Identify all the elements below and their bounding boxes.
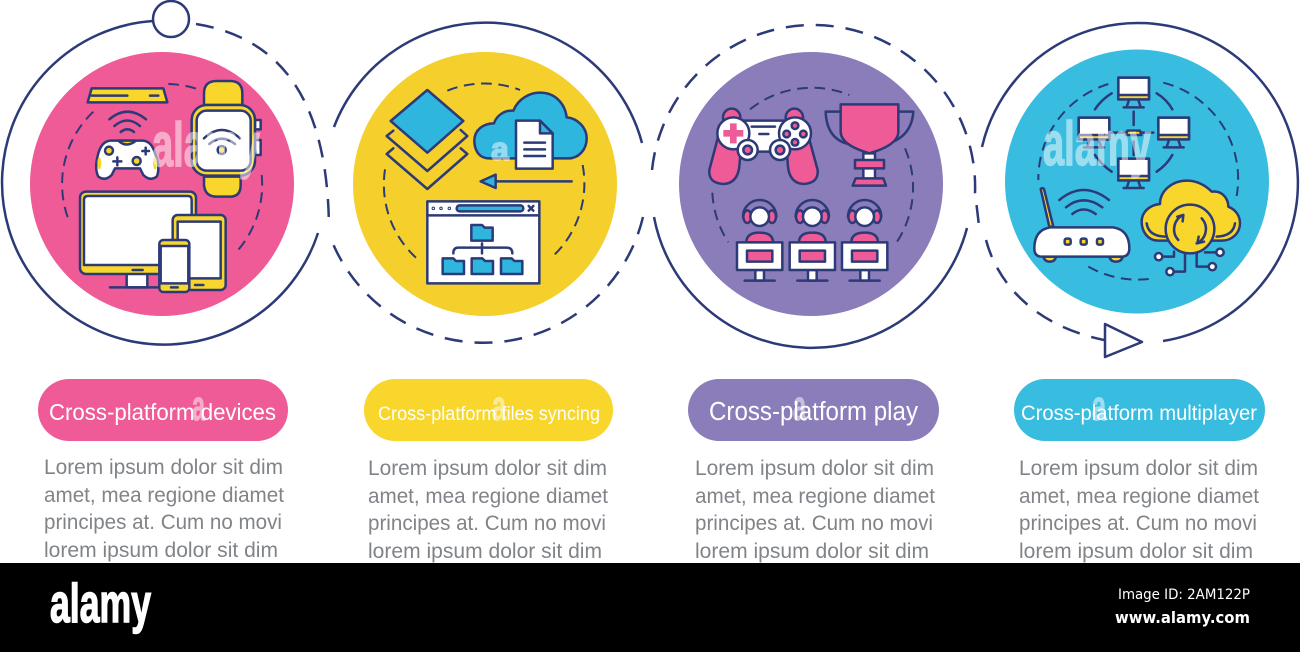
panel: cross-platform play circle	[652, 25, 979, 348]
text block: play: amet, mea regione diamet	[695, 484, 935, 508]
icon: folder tree window	[427, 201, 539, 283]
heading pill: multiplayer	[1014, 379, 1265, 441]
heading pill: play: Cross-platform play	[709, 398, 918, 426]
icon: gamepad with wifi	[96, 112, 158, 179]
icon: set-top box	[88, 88, 167, 102]
heading pill: play: a	[793, 382, 806, 429]
heading pill: multiplayer: Cross-platform multiplayer	[1021, 402, 1257, 425]
watermark: alamy	[152, 111, 260, 180]
arrow: end triangle	[1105, 324, 1142, 357]
text block: multiplayer	[1019, 456, 1259, 563]
icon: networked computers	[1079, 78, 1189, 188]
icon: monitor, tablet and phone	[80, 192, 226, 292]
text block: play: lorem ipsum dolor sit dim	[695, 539, 929, 563]
icon: cloud sync circuit	[1142, 181, 1240, 275]
icon: cloud document	[474, 93, 587, 169]
heading pill: files syncing: a	[492, 382, 506, 429]
icon: layers	[387, 90, 467, 189]
text block: files syncing	[368, 456, 608, 563]
heading pill: files syncing: Cross-platform files syncing	[378, 403, 600, 425]
text block: multiplayer: lorem ipsum dolor sit dim	[1019, 539, 1253, 563]
icon: smartwatch	[192, 81, 261, 197]
watermark: a	[491, 131, 509, 167]
text block: multiplayer: amet, mea regione diamet	[1019, 484, 1259, 508]
arrow: sync to window	[481, 175, 572, 188]
text block: devices: amet, mea regione diamet	[44, 483, 284, 507]
heading pill: devices	[38, 379, 288, 441]
text block: play	[695, 456, 935, 563]
panel: cross-platform devices circle	[2, 1, 329, 345]
footer band: Image ID: 2AM122P	[1118, 587, 1250, 603]
icon: wifi router	[1034, 188, 1129, 262]
text block: devices: Lorem ipsum dolor sit dim	[44, 455, 283, 479]
text block: files syncing: lorem ipsum dolor sit dim	[368, 539, 602, 563]
text block: devices: lorem ipsum dolor sit dim	[44, 538, 278, 562]
footer band	[0, 563, 1300, 652]
text block: devices: principes at. Cum no movi	[44, 510, 282, 534]
footer band: www.alamy.com	[1115, 608, 1250, 627]
text block: play: principes at. Cum no movi	[695, 511, 933, 535]
heading pill: devices: Cross-platform devices	[49, 399, 276, 425]
text block: play: Lorem ipsum dolor sit dim	[695, 456, 934, 480]
icon: game controller	[709, 109, 818, 184]
text block: files syncing: principes at. Cum no movi	[368, 511, 606, 535]
panel: cross-platform multiplayer circle	[982, 23, 1298, 357]
heading pill: play	[688, 379, 939, 441]
icon: three gamers at monitors	[737, 200, 887, 281]
text block: devices	[44, 455, 284, 562]
heading pill: devices: a	[192, 382, 205, 429]
footer band: alamy	[50, 572, 151, 634]
panel: files syncing circle	[331, 23, 643, 343]
text block: multiplayer: Lorem ipsum dolor sit dim	[1019, 456, 1258, 480]
watermark: alamy	[1043, 110, 1151, 179]
heading pill: multiplayer: a	[1092, 382, 1106, 429]
heading pill: files syncing	[364, 379, 613, 441]
text block: multiplayer: principes at. Cum no movi	[1019, 511, 1257, 535]
icon: trophy	[826, 104, 913, 186]
text block: files syncing: Lorem ipsum dolor sit dim	[368, 456, 607, 480]
text block: files syncing: amet, mea regione diamet	[368, 484, 608, 508]
